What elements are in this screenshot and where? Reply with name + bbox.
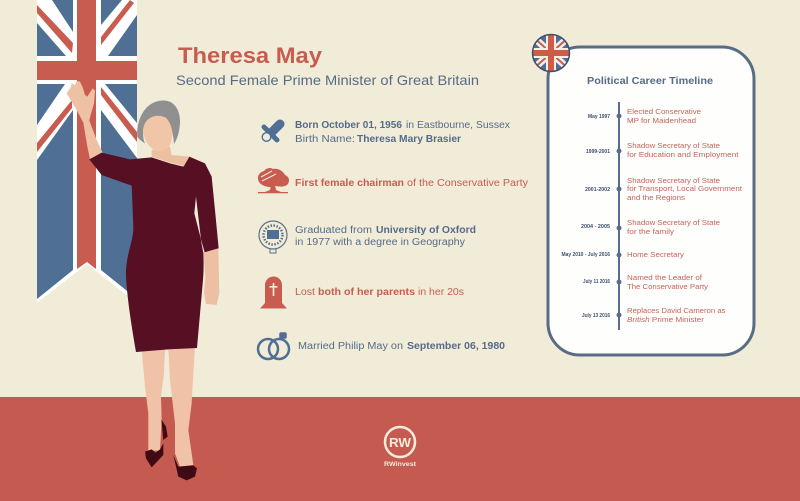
timeline events: Elected Conservative [627,107,701,116]
timeline events: for Transport, Local Government [627,184,743,193]
dress [89,153,219,352]
title: Theresa May [178,43,323,68]
fact: parents: in her 20s [418,287,464,298]
timeline dates: July 11 2016 [583,279,610,285]
timeline dates: May 2010 - July 2016 [562,252,610,258]
fact: education: in 1977 with a degree in Geography [295,237,465,248]
timeline events: for the family [627,227,674,236]
fact: chairman: First female chairman [295,178,404,189]
fact: chairman: of the Conservative Party [407,178,528,189]
timeline events: Home Secretary [627,250,684,259]
fact: education: University of Oxford [376,225,476,236]
logo: RWinvest: RW [389,435,412,450]
timeline events: The Conservative Party [627,282,708,291]
fact: birth: in Eastbourne, Sussex [406,120,510,131]
fact: parents [260,276,464,308]
fact: birth: Theresa Mary Brasier [357,134,461,145]
fact: birth [262,120,510,145]
icon: pacifier [262,124,280,141]
fact: marriage [258,333,505,359]
timeline dates: 1999-2001 [586,149,610,155]
fact: parents: Lost [295,287,315,298]
raised arm and hand [67,81,103,159]
timeline events [627,107,743,324]
subtitle: Second Female Prime Minister of Great Britain [176,72,479,88]
timeline events: Shadow Secretary of State [627,218,720,227]
footer band [0,397,800,501]
logo: RWinvest [384,427,417,468]
sleeve gap [194,197,201,239]
shoes [145,419,197,480]
logo: RWinvest: RWinvest [384,461,417,468]
fact: education [259,221,476,253]
fact: birth: Birth Name: [295,134,355,145]
panel: political career timeline [532,34,754,355]
neck and chest [152,147,189,166]
timeline dates [562,114,610,319]
timeline events: and the Regions [627,193,685,202]
fact: marriage: September 06, 1980 [407,341,505,352]
timeline events: MP for Maidenhead [627,116,696,125]
timeline events: Shadow Secretary of State [627,141,720,150]
timeline events: Shadow Secretary of State [627,176,720,185]
fact: parents: both of her parents [318,287,415,298]
icon: oxford seal [259,221,287,253]
timeline dates: July 13 2016 [582,313,610,319]
icon: wedding rings [258,333,289,359]
right hand and forearm [203,248,219,305]
hair [137,101,180,144]
timeline dates: May 1997 [588,114,610,120]
timeline events: Replaces David Cameron as [627,306,726,315]
timeline events: British Prime Minister [627,315,705,324]
union jack banner [37,0,137,303]
timeline dates: 2004 - 2005 [581,224,610,230]
icon: conservative tree [258,168,289,193]
panel heading: Political Career Timeline [587,75,713,87]
fact: marriage: Married Philip May on [298,341,403,352]
timeline events: Named the Leader of [627,273,703,282]
face [143,116,172,151]
timeline events: for Education and Employment [627,150,739,159]
timeline dates: 2001-2002 [585,187,610,193]
woman figure [67,81,219,480]
timeline axis [616,102,622,330]
icon: tombstone [260,276,287,308]
fact: birth: Born October 01, 1956 [295,120,402,131]
icon: union jack circle [532,34,570,72]
fact: chairman [258,168,528,193]
legs [142,347,195,467]
fact: education: Graduated from [295,225,372,236]
